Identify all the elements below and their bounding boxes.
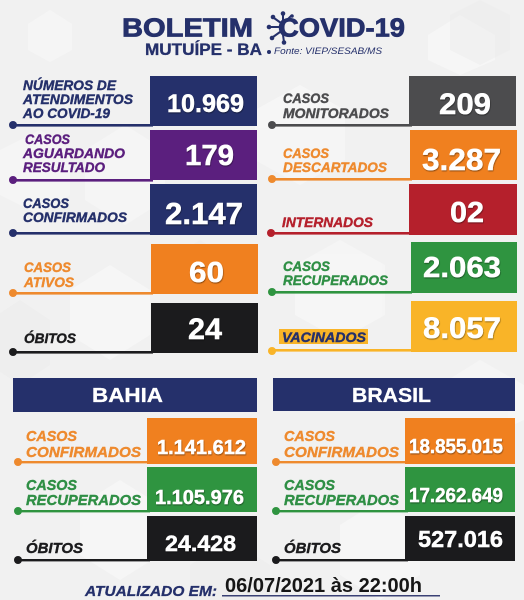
header (122, 11, 405, 59)
row: óbitos (272, 516, 515, 564)
panel: números de atendimentos (9, 76, 257, 129)
row: óbitos: ÓBITOS (284, 539, 341, 557)
row: recuperados: CASOS (284, 477, 335, 494)
row: recuperados (272, 467, 515, 515)
panel: casos descartados (268, 130, 517, 183)
row: confirmados: CASOS (284, 428, 335, 445)
value: 2.147 (165, 196, 243, 231)
panel: aguardando resultado (9, 130, 257, 184)
footer: updated at (84, 575, 440, 600)
source: Fonte: VIEP/SESAB/MS (274, 46, 383, 57)
heading: BAHIA (92, 385, 163, 407)
value: 24 (188, 313, 222, 346)
panel: vacinados (268, 301, 517, 355)
row: confirmados: 18.855.015 (409, 436, 503, 458)
label (23, 196, 127, 225)
footer: updated at: ATUALIZADO EM: (84, 583, 217, 600)
row: óbitos: 24.428 (165, 531, 236, 556)
row: confirmados (14, 418, 257, 466)
label: CASOS (24, 260, 71, 275)
heading (273, 378, 515, 411)
panel: Brasil (272, 378, 515, 564)
label: RECUPERADOS (283, 273, 388, 288)
title: COVID-19 (279, 12, 405, 42)
footer: updated at: 06/07/2021 às 22:00h (225, 575, 422, 597)
label: NÚMEROS DE (23, 78, 117, 93)
label: RESULTADO (23, 160, 105, 175)
row: recuperados: RECUPERADOS (26, 492, 141, 509)
row: recuperados (14, 467, 257, 515)
row: recuperados: 1.105.976 (155, 487, 244, 509)
row: confirmados: 1.141.612 (157, 437, 246, 459)
value: 2.063 (423, 252, 501, 284)
label: AGUARDANDO (22, 146, 126, 161)
label: CASOS (283, 146, 329, 161)
panel: casos monitorados (268, 76, 516, 129)
value: 179 (185, 140, 234, 172)
value: 60 (189, 257, 224, 289)
panel: casos confirmados (9, 184, 257, 237)
subtitle: MUTUÍPE - BA (145, 40, 262, 59)
label: ATENDIMENTOS (22, 92, 133, 107)
row: recuperados: RECUPERADOS (284, 492, 399, 509)
title: BOLETIM (122, 12, 253, 42)
panel: casos recuperados (268, 242, 517, 296)
row: confirmados: CASOS (26, 428, 77, 445)
label: CONFIRMADOS (23, 210, 127, 225)
panel: óbitos (9, 303, 258, 356)
panel: Bahia (13, 378, 257, 564)
heading (13, 378, 257, 412)
row: recuperados: 17.262.649 (409, 485, 503, 507)
label: CASOS (283, 259, 330, 274)
label: CASOS (23, 196, 69, 211)
label: ÓBITOS (24, 331, 76, 346)
label: ATIVOS (23, 275, 74, 290)
label: VACINADOS (282, 330, 366, 345)
label (283, 259, 388, 288)
label (22, 132, 126, 175)
label: DESCARTADOS (283, 160, 387, 175)
label (23, 260, 74, 290)
row: confirmados: CONFIRMADOS (284, 444, 399, 461)
row: óbitos (14, 516, 257, 564)
label (283, 146, 387, 175)
value: 3.287 (422, 142, 501, 177)
label (283, 91, 389, 121)
value: 209 (439, 88, 491, 121)
title (122, 12, 405, 42)
row: confirmados (272, 418, 515, 466)
heading: BRASIL (352, 385, 431, 407)
label: CASOS (283, 91, 329, 106)
label: MONITORADOS (283, 106, 389, 121)
value: 10.969 (167, 90, 244, 118)
panel: casos ativos (9, 244, 258, 297)
value: 02 (450, 197, 484, 229)
value: 8.057 (423, 312, 501, 345)
icon: virus (267, 11, 294, 45)
label (22, 78, 133, 121)
row: recuperados: CASOS (26, 477, 77, 494)
label: AO COVID-19 (22, 106, 110, 121)
label: INTERNADOS (282, 215, 373, 230)
row: óbitos: ÓBITOS (26, 539, 83, 557)
label: CASOS (25, 132, 70, 147)
bullet (267, 50, 271, 54)
panel: internados (267, 184, 517, 237)
row: confirmados: CONFIRMADOS (26, 444, 141, 461)
row: óbitos: 527.016 (418, 526, 503, 552)
